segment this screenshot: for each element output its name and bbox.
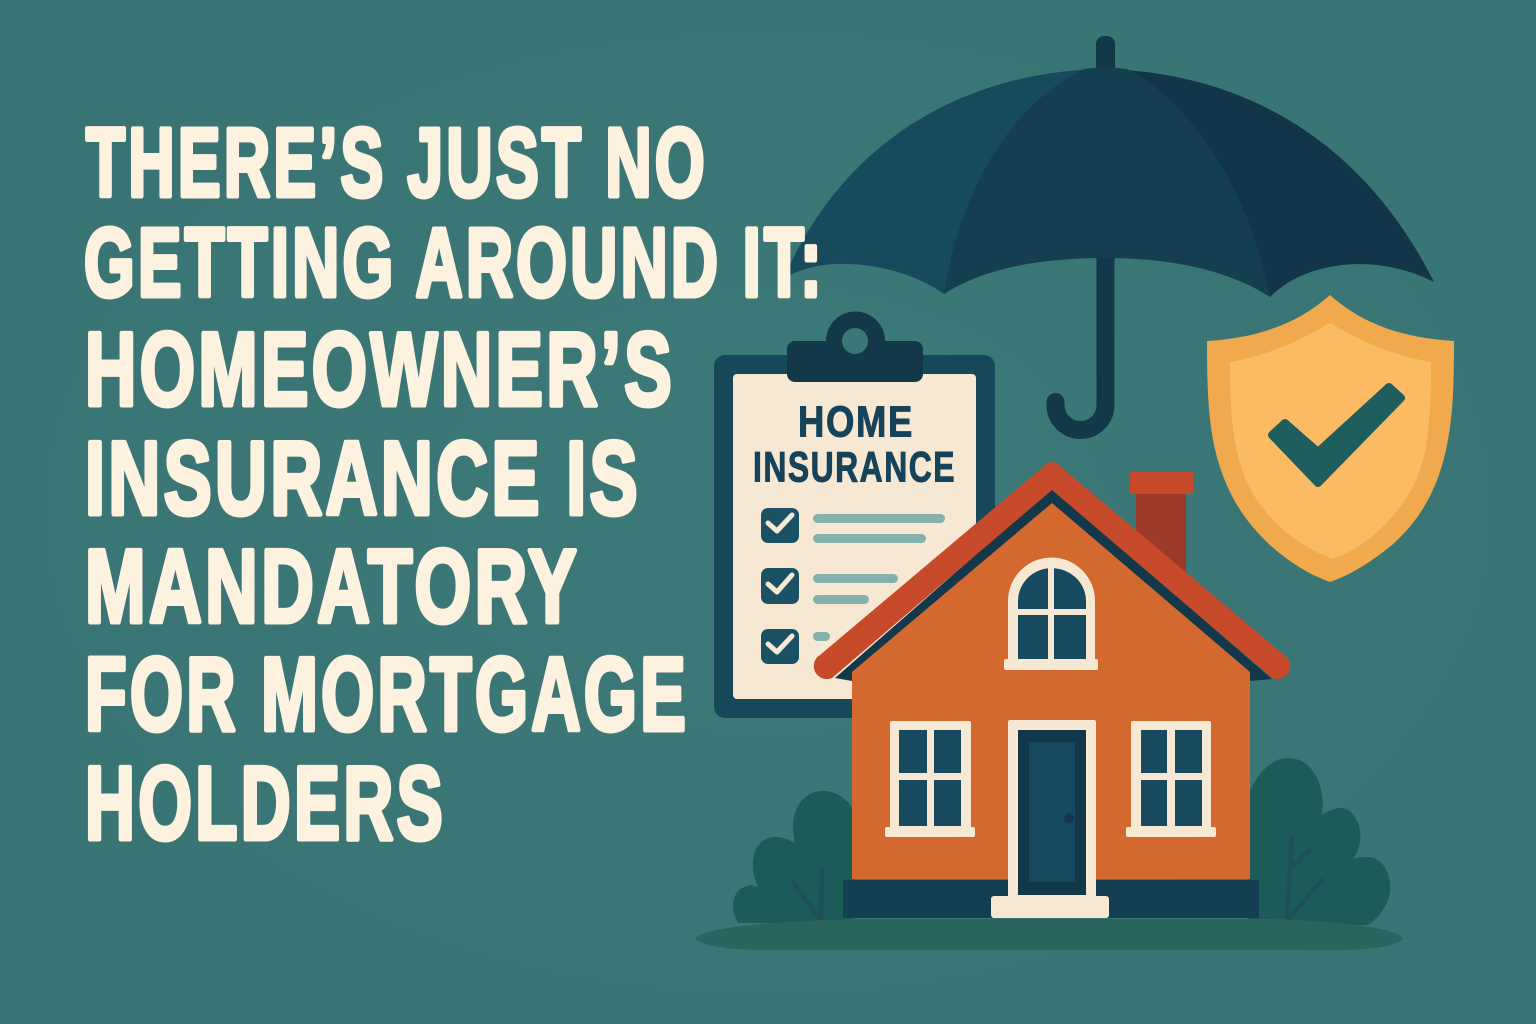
umbrella handle and hook [1056, 250, 1106, 430]
title [84, 108, 825, 862]
clipboard heading: HOME [798, 398, 914, 446]
clipboard heading: INSURANCE [753, 444, 956, 492]
umbrella canopy centre panel [944, 68, 1270, 297]
clipboard clip [787, 312, 923, 382]
left window [885, 721, 975, 837]
shield check mark [1272, 387, 1401, 483]
title: INSURANCE IS [85, 421, 641, 537]
icon: umbrella [784, 36, 1434, 430]
icon: house [814, 462, 1290, 918]
chimney [1130, 472, 1193, 580]
icon: clipboard [714, 312, 995, 718]
shield inner [1230, 323, 1431, 559]
roof [814, 462, 1290, 679]
umbrella canopy left panel [784, 69, 1105, 294]
title: THERE’S JUST NO [86, 108, 708, 217]
roof underside [835, 488, 1272, 681]
icon: right bush [1248, 758, 1390, 925]
right window [1126, 721, 1216, 837]
icon: shield [1207, 295, 1454, 582]
umbrella ferrule [1096, 36, 1115, 76]
checklist item 1 [761, 508, 945, 543]
title: HOLDERS [85, 746, 446, 862]
house wall [852, 503, 1250, 879]
clip hole [842, 328, 868, 354]
title: FOR MORTGAGE [85, 637, 689, 753]
clipboard heading [753, 398, 956, 492]
clipboard paper [733, 374, 976, 699]
ground [695, 919, 1403, 950]
clipboard board [714, 355, 995, 718]
arched window [1004, 558, 1098, 670]
door step [991, 896, 1109, 918]
icon: left bush [733, 791, 855, 923]
checklist item 3 [761, 629, 830, 664]
house foundation [843, 880, 1259, 918]
umbrella canopy right panel [1105, 69, 1434, 297]
title: HOMEOWNER’S [85, 312, 675, 428]
title: GETTING AROUND IT: [84, 208, 825, 317]
door [1008, 720, 1096, 900]
title: MANDATORY [85, 529, 580, 645]
checklist item 2 [761, 568, 898, 604]
shield outer [1207, 295, 1454, 582]
